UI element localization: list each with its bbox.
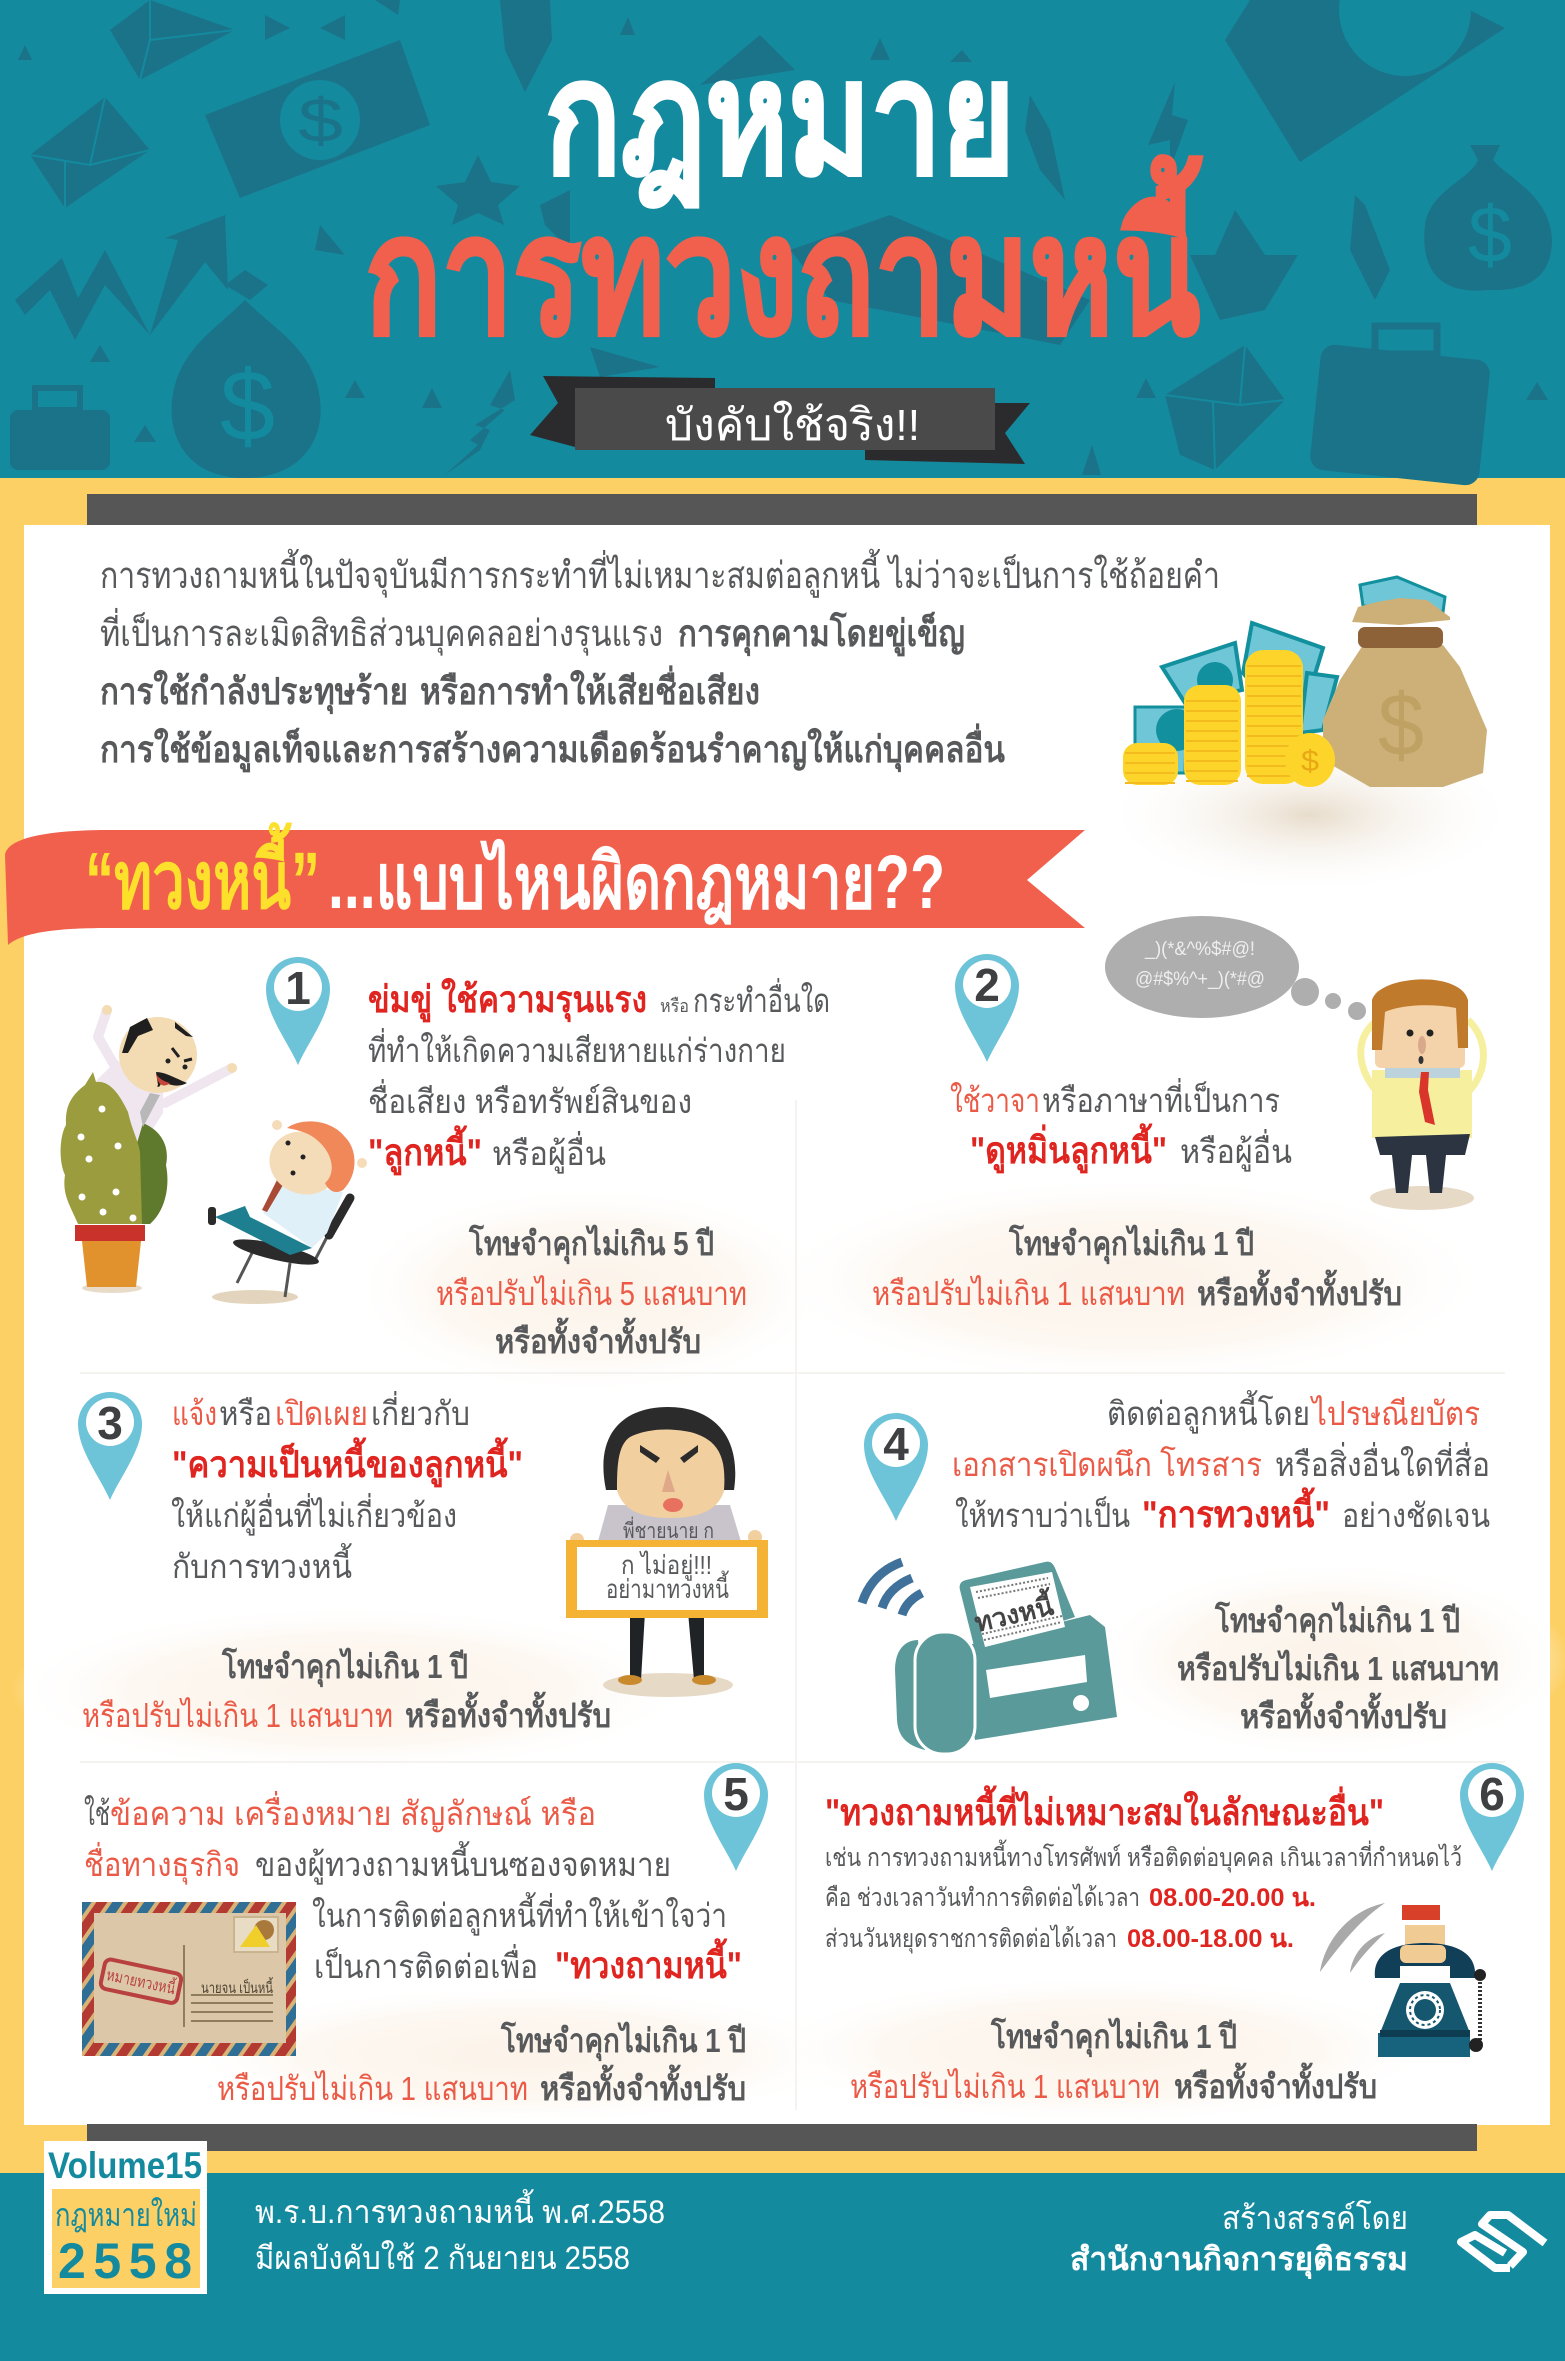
pattern circles on bills and envelope flaps [280, 0, 1471, 160]
pattern dollar signs: $ [220, 350, 275, 462]
penalty 6 [850, 2017, 1377, 2105]
text 3: กับการทวงหนี้ [172, 1543, 353, 1585]
footer credit [1070, 2200, 1408, 2280]
text 3: แจ้ง [172, 1395, 217, 1432]
text 6: ส่วนวันหยุดราชการติดต่อได้เวลา [825, 1924, 1117, 1954]
text 5: ในการติดต่อลูกหนี้ที่ทำให้เข้าใจว่า [312, 1892, 727, 1936]
text 5: ใช้ [84, 1795, 110, 1832]
penalty 6: หรือปรับไม่เกิน 1 แสนบาท [850, 2068, 1160, 2105]
speech bubble [1105, 916, 1366, 1020]
title line 1: กฎหมาย [545, 31, 1015, 208]
footer law text: มีผลบังคับใช้ 2 กันยายน 2558 [255, 2240, 630, 2276]
text 1: "ลูกหนี้" [368, 1125, 482, 1176]
text 1: ข่มขู่ ใช้ความรุนแรง [368, 977, 647, 1023]
text 2 [950, 1078, 1292, 1174]
text 6: 08.00-18.00 น. [1127, 1925, 1294, 1953]
penalty 5 [217, 2021, 746, 2107]
penalty 1: หรือทั้งจำทั้งปรับ [495, 1317, 701, 1360]
text 5: ชื่อทางธุรกิจ [84, 1842, 240, 1885]
speech bubble: @#$%^+_)(*#@ [1135, 969, 1265, 990]
penalty 2: โทษจำคุกไม่เกิน 1 ปี [1008, 1224, 1254, 1265]
illustration: man holding sign: พี่ชายนาย ก [623, 1516, 714, 1543]
illustration: scared man falling off chair [208, 1120, 367, 1304]
penalty 3 [82, 1647, 611, 1734]
logo [1461, 2215, 1545, 2268]
penalty 1: หรือปรับไม่เกิน 5 แสนบาท [436, 1275, 747, 1312]
text 1: หรือผู้อื่น [492, 1131, 606, 1174]
pin 3: 3 [97, 1397, 123, 1449]
footer law text: พ.ร.บ.การทวงถามหนี้ พ.ศ.2558 [255, 2189, 665, 2230]
panel 6: other improper collection [825, 1763, 1524, 2105]
text 4: อย่างชัดเจน [1342, 1497, 1490, 1534]
text 2: หรือภาษาที่เป็นการ [1042, 1078, 1280, 1119]
pin 3 [78, 1392, 142, 1500]
soft penalty highlights [10, 1175, 1565, 2125]
pin 5 [704, 1763, 768, 1871]
penalty 4: หรือปรับไม่เกิน 1 แสนบาท [1177, 1649, 1499, 1687]
footer band [0, 2141, 1565, 2361]
text 1: กระทำอื่นใด [693, 978, 830, 1019]
penalty 6: โทษจำคุกไม่เกิน 1 ปี [990, 2017, 1237, 2058]
intro paragraph: การคุกคามโดยขู่เข็ญ [678, 610, 965, 657]
text 5: ของผู้ทวงถามหนี้บนซองจดหมาย [255, 1841, 671, 1885]
intro paragraph: การทวงถามหนี้ในปัจจุบันมีการกระทำที่ไม่เหมาะสมต่อลูกหนี้ ไม่ว่าจะเป็นการใช้ถ้อยคำ [100, 548, 1220, 598]
icon: rotary telephone [1320, 1903, 1486, 2057]
penalty 2: หรือทั้งจำทั้งปรับ [1197, 1269, 1402, 1312]
text 1: ชื่อเสียง หรือทรัพย์สินของ [368, 1079, 692, 1120]
penalty 6: หรือทั้งจำทั้งปรับ [1174, 2062, 1377, 2105]
panel 5: envelope markings [82, 1763, 768, 2107]
icon: money bag, coins and banknotes [1100, 577, 1520, 895]
illustration: angry man behind bush [61, 1005, 237, 1293]
text 3: เปิดเผย [275, 1395, 368, 1432]
text 4: หรือสิ่งอื่นใดที่สื่อ [1275, 1442, 1490, 1483]
text 5: "ทวงถามหนี้" [555, 1938, 742, 1986]
top dark bar [87, 494, 1477, 526]
penalty 3: โทษจำคุกไม่เกิน 1 ปี [221, 1647, 468, 1688]
section banner [5, 822, 1085, 945]
text 4 [952, 1390, 1490, 1535]
intro paragraph: การใช้กำลังประทุษร้าย [100, 669, 408, 715]
text 2: ใช้วาจา [950, 1082, 1040, 1119]
pattern dollar signs: $ [298, 87, 343, 156]
icon: postcard: นายจน เป็นหนี้ [201, 1977, 273, 1997]
panel 4: postcards and fax [862, 1390, 1499, 1754]
icon: postcard: หมายทวงหนี้ [105, 1963, 178, 1998]
main white panel [5, 525, 1565, 2125]
text 1: หรือ [660, 996, 689, 1016]
panel 2: insulting language [872, 916, 1483, 1312]
text 1 [368, 977, 830, 1176]
intro paragraph: ที่เป็นการละเมิดสิทธิส่วนบุคคลอย่างรุนแรง [100, 607, 663, 656]
text 5: ข้อความ เครื่องหมาย สัญลักษณ์ หรือ [110, 1791, 596, 1832]
text 2: หรือผู้อื่น [1180, 1129, 1292, 1172]
penalty 1: โทษจำคุกไม่เกิน 5 ปี [468, 1224, 714, 1265]
text 6: เช่น การทวงถามหนี้ทางโทรศัพท์ หรือติดต่อบุคคล เกินเวลาที่กำหนดไว้ [825, 1839, 1462, 1873]
illustration: man holding sign: อย่ามาทวงหนี้ [606, 1570, 729, 1604]
pin 5: 5 [723, 1768, 749, 1820]
illustration: man with hands on head [1361, 979, 1483, 1210]
speech bubble: _)(*&^%$#@! [1144, 939, 1255, 960]
penalty 4: หรือทั้งจำทั้งปรับ [1240, 1692, 1447, 1735]
pin 1 [266, 957, 330, 1065]
penalty 3: หรือปรับไม่เกิน 1 แสนบาท [82, 1697, 393, 1734]
pin 2 [955, 954, 1019, 1062]
text 3: เกี่ยวกับ [371, 1391, 470, 1432]
text 5: เป็นการติดต่อเพื่อ [314, 1944, 538, 1985]
footer law text [255, 2189, 665, 2276]
intro paragraph: การใช้ข้อมูลเท็จและการสร้างความเดือดร้อนรำคาญให้แก่บุคคลอื่น [100, 723, 1005, 773]
illustration: man holding sign [566, 1407, 768, 1697]
text 6: คือ ช่วงเวลาวันทำการติดต่อได้เวลา [825, 1883, 1140, 1912]
penalty 4 [1177, 1601, 1499, 1735]
volume badge: Volume15 [48, 2145, 202, 2186]
pin 6: 6 [1479, 1768, 1505, 1820]
section banner: “ทวงหนี้” [85, 822, 320, 925]
intro paragraph: หรือการทำให้เสียชื่อเสียง [420, 665, 760, 712]
pin 2: 2 [974, 959, 1000, 1011]
illustration: man holding sign: ก ไม่อยู่!!! [621, 1550, 712, 1581]
text 1: ที่ทำให้เกิดความเสียหายแก่ร่างกาย [368, 1028, 786, 1069]
penalty 2 [872, 1224, 1402, 1312]
volume badge: กฎหมายใหม่ [55, 2197, 197, 2233]
title line 2: การทวงถามหนี้ [365, 155, 1202, 368]
text 6: "ทวงถามหนี้ที่ไม่เหมาะสมในลักษณะอื่น" [825, 1785, 1384, 1833]
text 4: ให้ทราบว่าเป็น [955, 1496, 1130, 1534]
penalty 5: หรือทั้งจำทั้งปรับ [540, 2064, 746, 2107]
ribbon with subtitle: บังคับใช้จริง!! [665, 400, 920, 450]
text 3: หรือ [219, 1395, 272, 1432]
text 3: ให้แก่ผู้อื่นที่ไม่เกี่ยวข้อง [171, 1493, 457, 1536]
text 6 [825, 1785, 1462, 1954]
bottom dark bar [87, 2124, 1477, 2151]
text 3: "ความเป็นหนี้ของลูกหนี้" [172, 1437, 523, 1488]
background pattern of money icons [10, 0, 1552, 487]
icon: money bag, coins and banknotes: $ [1378, 675, 1424, 774]
ribbon with subtitle [530, 376, 1030, 464]
footer credit: สร้างสรรค์โดย [1222, 2200, 1408, 2236]
intro paragraph [100, 548, 1220, 773]
pattern dollar signs [220, 87, 1512, 462]
header band [0, 0, 1565, 487]
icon: postcard [82, 1902, 296, 2056]
panel 1: threats [61, 957, 830, 1360]
pin 1: 1 [285, 962, 311, 1014]
volume badge [44, 2141, 207, 2294]
text 3 [171, 1391, 523, 1585]
penalty 2: หรือปรับไม่เกิน 1 แสนบาท [872, 1275, 1185, 1312]
pin 4 [864, 1413, 928, 1521]
penalty 3: หรือทั้งจำทั้งปรับ [405, 1691, 611, 1734]
penalty 5: หรือปรับไม่เกิน 1 แสนบาท [217, 2070, 528, 2107]
pin 6 [1460, 1763, 1524, 1871]
footer credit: สำนักงานกิจการยุติธรรม [1070, 2241, 1408, 2280]
penalty 5: โทษจำคุกไม่เกิน 1 ปี [500, 2021, 746, 2062]
text 5 [84, 1791, 742, 1986]
pattern dollar signs: $ [1468, 190, 1512, 279]
text 4: "การทวงหนี้" [1142, 1487, 1330, 1535]
text 2: "ดูหมิ่นลูกหนี้" [970, 1123, 1167, 1174]
icon: fax machine: ทวงหนี้ [970, 1586, 1057, 1638]
pin 4: 4 [883, 1418, 909, 1470]
text 4: เอกสารเปิดผนึก โทรสาร [952, 1446, 1262, 1483]
volume badge: 2558 [58, 2233, 192, 2289]
text 4: ติดต่อลูกหนี้โดย [1107, 1390, 1310, 1434]
panel 3: disclosure [78, 1391, 768, 1734]
penalty 1 [436, 1224, 747, 1360]
penalty 4: โทษจำคุกไม่เกิน 1 ปี [1214, 1601, 1460, 1642]
section banner: ...แบบไหนผิดกฎหมาย?? [328, 838, 945, 925]
pattern envelope lines [30, 0, 1285, 470]
text 6: 08.00-20.00 น. [1149, 1884, 1316, 1912]
icon: money bag, coins and banknotes: $ [1301, 745, 1319, 778]
text 4: ไปรษณียบัตร [1309, 1395, 1480, 1432]
icon: fax machine [862, 1562, 1117, 1754]
